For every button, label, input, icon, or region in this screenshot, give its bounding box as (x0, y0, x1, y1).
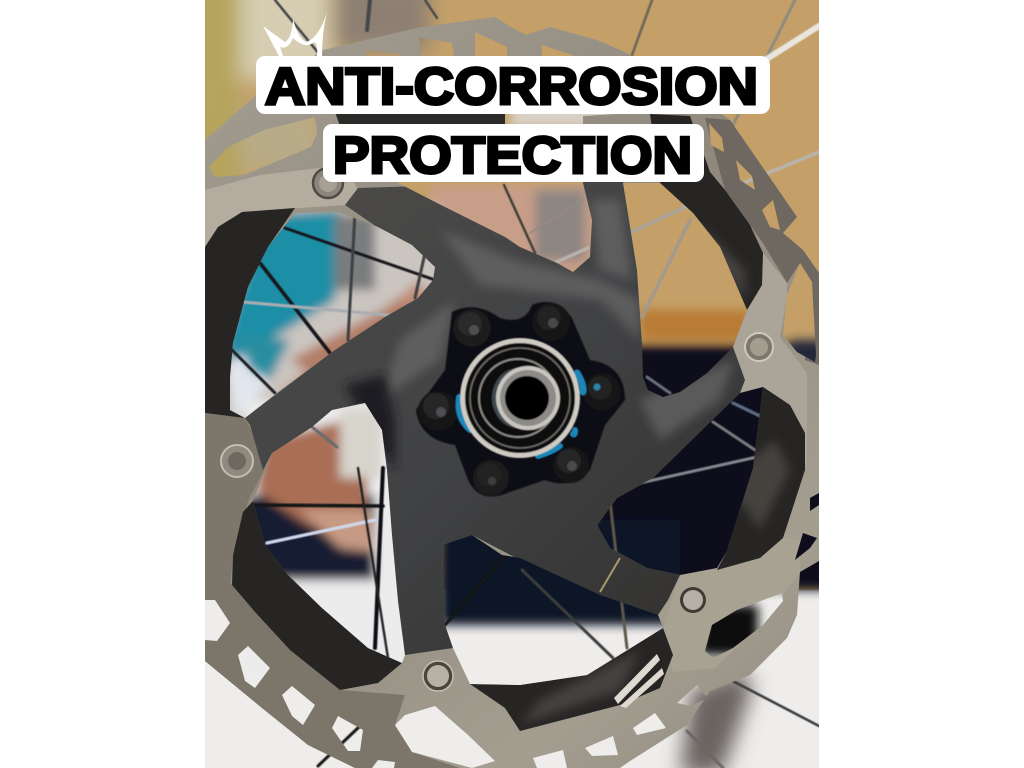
hub recess around bearing (416, 302, 625, 496)
right light tab (733, 253, 807, 470)
dark braking track segments (205, 114, 805, 731)
rivet: bottom (423, 661, 453, 691)
lower-right light tab (673, 571, 800, 672)
hub bearing and axle bore (460, 338, 580, 458)
bolt (418, 391, 458, 431)
rotor outer braking ring (205, 17, 819, 768)
window C colours (430, 185, 600, 275)
rivet: left (221, 445, 253, 477)
bolt (583, 373, 621, 411)
right side window colours (595, 345, 835, 590)
icon: crown logo (263, 12, 327, 56)
carrier shadow on left arm (345, 375, 395, 470)
torx bolts (418, 303, 621, 496)
wheel spokes (232, 0, 819, 768)
track wear (520, 225, 790, 725)
bolt (473, 460, 509, 496)
bolt (553, 447, 589, 483)
left tab shading (205, 413, 265, 585)
brake rotor (205, 17, 819, 768)
upper-right worn band (705, 118, 819, 365)
carrier worn highlights (380, 200, 735, 440)
title line 1: ANTI-CORROSION (265, 58, 758, 116)
carrier paint scratch (600, 558, 620, 592)
rotor model markings (614, 654, 664, 708)
window F colours (245, 400, 415, 680)
photo background: blurred workshop (190, 0, 835, 768)
window A colours (225, 205, 440, 425)
blue anti-corrosion sealant (458, 373, 583, 456)
upper-left light tab (205, 165, 358, 247)
bolt (453, 309, 491, 347)
bolt (532, 303, 570, 341)
carrier top edge behind title (336, 114, 505, 124)
rivet: lower right (680, 587, 706, 613)
infographic canvas (205, 0, 819, 768)
rivet: right (745, 333, 773, 361)
photograph: brake rotor on a wheel (190, 0, 835, 768)
title (256, 56, 770, 185)
title line 2: PROTECTION (333, 127, 692, 185)
black carrier spider (245, 180, 745, 655)
rivet: upper left (313, 168, 343, 198)
lower-left worn band (205, 565, 460, 768)
